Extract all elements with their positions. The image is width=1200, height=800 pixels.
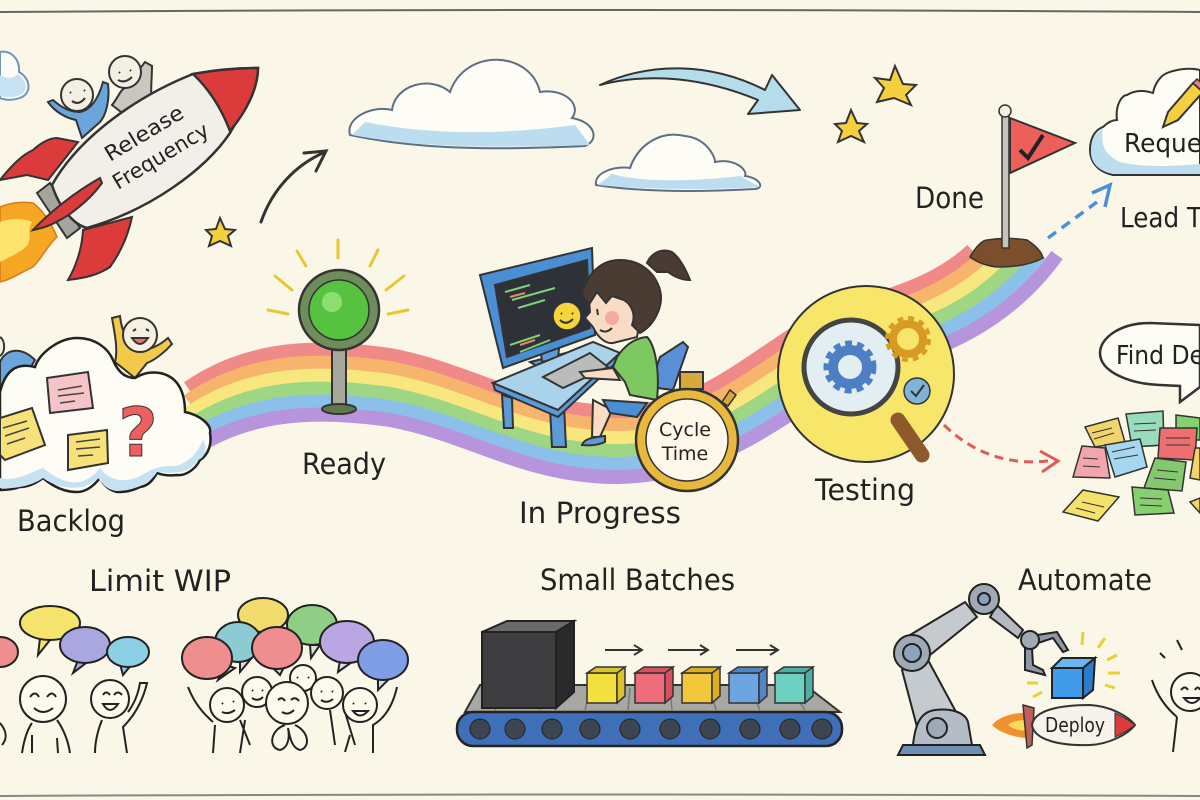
rainbow road: [188, 250, 1057, 477]
flag: done: [970, 105, 1075, 267]
star: near rocket: [206, 218, 235, 246]
robot arm: [894, 584, 1068, 755]
leg and shoe: [592, 400, 612, 437]
cloud: top-left corner: [0, 52, 28, 100]
stopwatch: cycle time: Time: [661, 443, 708, 465]
hair: [582, 260, 661, 333]
rocket label: Frequency: [108, 118, 213, 194]
heading: automate: Automate: [1018, 563, 1152, 597]
person: waving on backlog: [112, 316, 172, 378]
arrow: small black curved: [261, 151, 326, 222]
heading: limit wip: Limit WIP: [89, 564, 231, 598]
girl coding: [580, 250, 690, 445]
blue cube: [1027, 632, 1120, 698]
small coloured boxes: [587, 667, 813, 703]
limit wip: crowded people: [182, 598, 408, 753]
sticky note: yellow lower: [68, 430, 108, 470]
desk: [493, 342, 620, 447]
label: in progress: In Progress: [519, 496, 681, 530]
stopwatch: cycle time: [636, 372, 738, 491]
rocket flame: [0, 202, 57, 282]
star: top right large: [875, 66, 916, 105]
shirt: [613, 337, 658, 400]
ponytail: [647, 250, 690, 280]
icon: pencil: [1163, 79, 1200, 127]
label: backlog: Backlog: [17, 504, 125, 538]
speech bubble: find defects: [1100, 323, 1200, 402]
label: testing: Testing: [814, 473, 915, 507]
rocket label: Release: [100, 100, 188, 166]
cloud: top centre: [349, 60, 594, 148]
person: cheering: [1152, 640, 1200, 752]
shorts: [603, 400, 647, 417]
rocket tail: [37, 183, 80, 238]
computer desk: [480, 248, 620, 447]
rocket nose: [193, 68, 258, 131]
cloud: backlog: [0, 338, 211, 492]
star: top centre small: [835, 110, 867, 142]
small batches: arrows: [605, 645, 778, 655]
monitor: [480, 248, 595, 371]
arrow: large blue curved: [600, 68, 800, 114]
arm: [580, 368, 620, 380]
arrow: blue dashed: [1048, 185, 1110, 238]
face: [585, 288, 645, 343]
person: behind backlog cloud: [0, 337, 35, 390]
sticky note: pink: [47, 372, 93, 413]
rocket: deploy: Deploy: [1045, 713, 1105, 737]
cloud: requests: [1090, 69, 1200, 175]
magnifying glass: testing: [778, 286, 954, 462]
heading: small batches: Small Batches: [540, 563, 735, 597]
rocket body: [52, 68, 258, 228]
chair: [650, 342, 688, 390]
traffic light: ready: [268, 240, 408, 414]
speech bubbles left: [0, 606, 149, 675]
rocket centre fin: [33, 178, 102, 230]
limit wip: few people: [0, 606, 149, 753]
label: ready: Ready: [302, 447, 386, 481]
rocket: deploy: [992, 705, 1135, 748]
large black box: [482, 621, 574, 708]
conveyor belt: [457, 685, 842, 746]
stopwatch: cycle time: Cycle: [659, 419, 711, 441]
sticky note: yellow left: [0, 408, 45, 460]
sticky note pile: defects: [1063, 411, 1200, 521]
rocket: release frequency: [0, 68, 258, 282]
people on rocket: [48, 56, 152, 138]
label: done: Done: [915, 181, 984, 215]
arrow: red dashed: [944, 425, 1058, 472]
cloud: small centre: [596, 135, 760, 191]
question mark: ?: [118, 394, 158, 473]
rocket fins: [0, 138, 78, 180]
